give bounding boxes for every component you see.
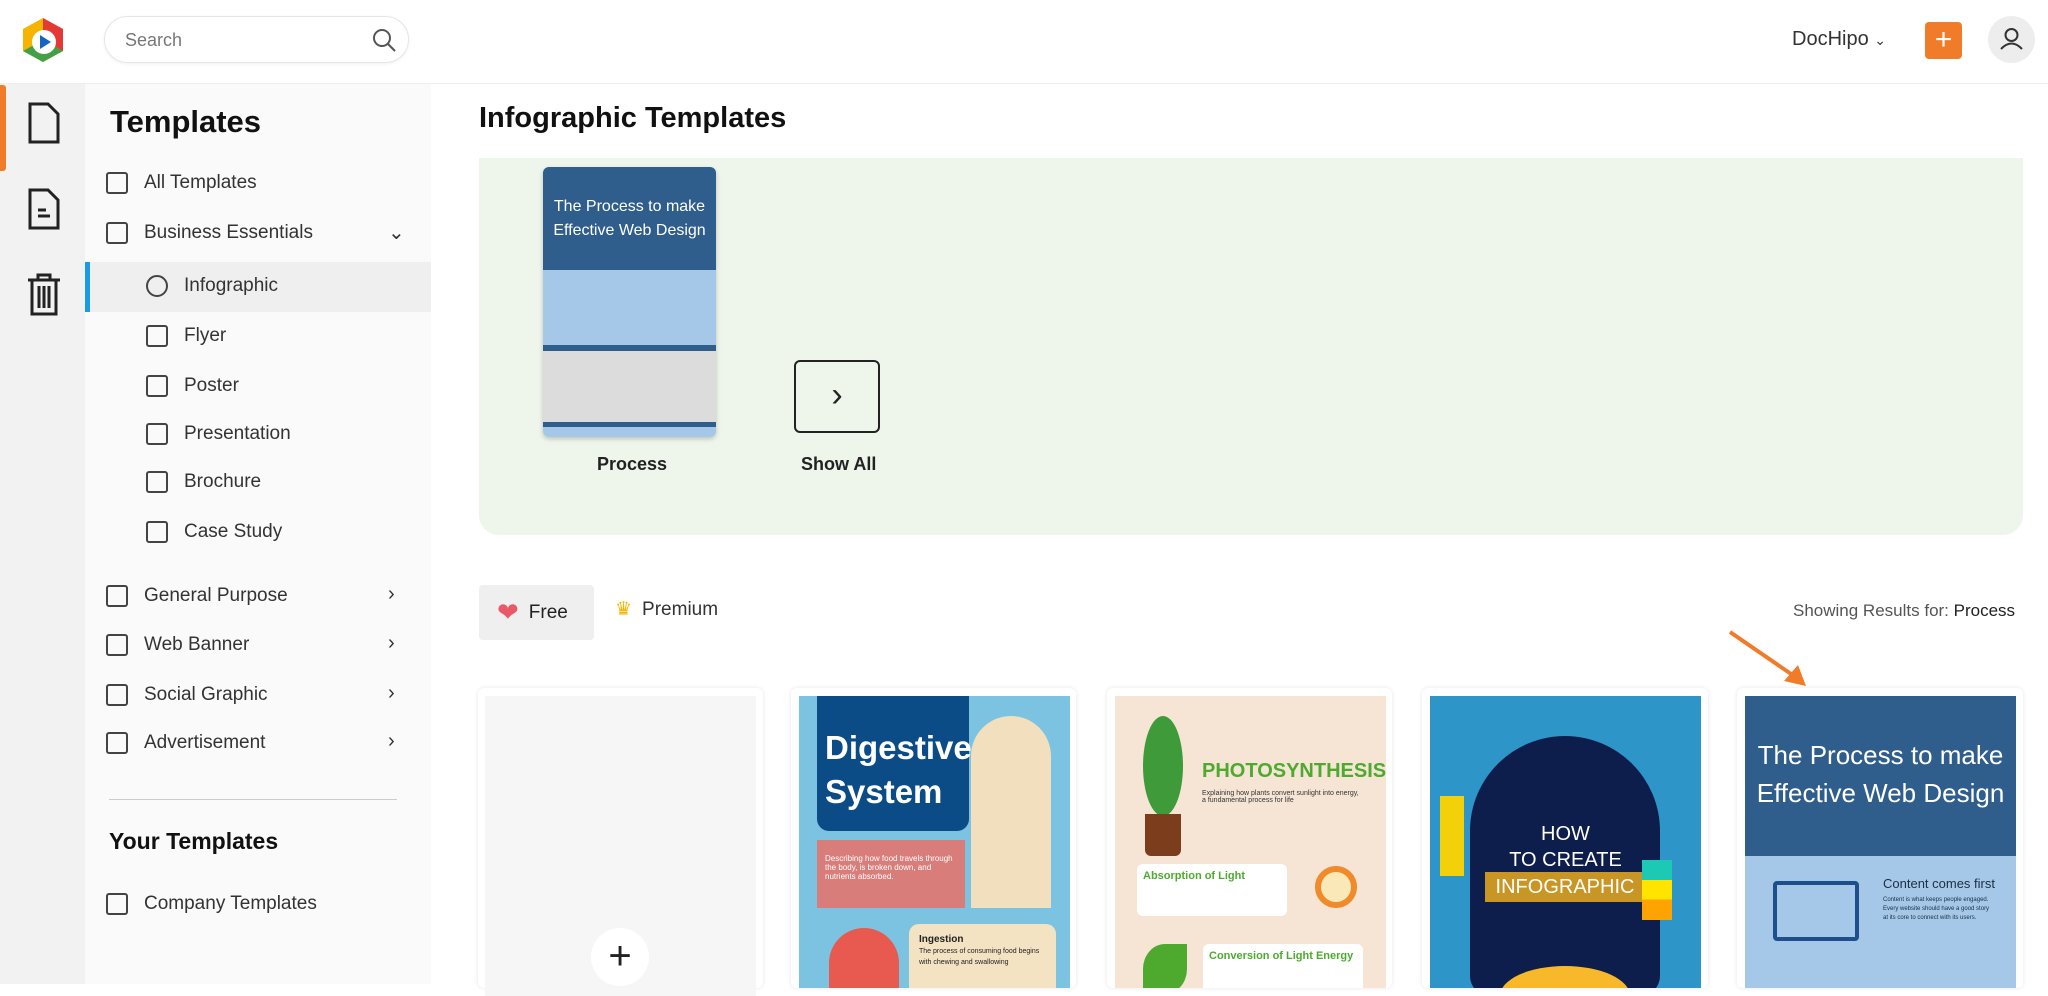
card: process web design (selected): Content is what keeps people engaged. Every website should have a good story at its core to connect with its users. — [1883, 897, 1989, 921]
card: photosynthesis: PHOTOSYNTHESIS — [1202, 760, 1386, 782]
card: blank: + — [608, 934, 632, 978]
sidebar menu: ⌄ — [388, 222, 405, 244]
panel: featured — [479, 158, 2023, 535]
filter: premium: ♛ Premium — [615, 599, 718, 620]
template thumb: process: The Process to make — [554, 198, 705, 215]
sidebar menu: Your Templates — [109, 828, 278, 854]
template thumb: process: Effective Web Design — [553, 222, 706, 239]
show all button — [794, 360, 880, 433]
sidebar menu: Flyer — [184, 325, 226, 346]
show all button: › — [831, 376, 843, 414]
card: digestive system — [791, 688, 1076, 988]
card: digestive system: Describing how food travels through the body, is broken down, and nutrients absorbed. — [825, 854, 953, 881]
sidebar menu: Company Templates — [144, 893, 317, 914]
sidebar menu: › — [388, 682, 395, 704]
card: process web design (selected): The Process to make — [1758, 740, 2003, 770]
icon: trash — [28, 274, 60, 316]
panel: featured: Process — [597, 454, 667, 474]
card: how to create infographic — [1422, 688, 1708, 988]
icon rail — [0, 84, 85, 984]
icon: avatar — [1988, 16, 2035, 63]
icon: plus button: + — [1935, 23, 1952, 56]
sidebar menu: General Purpose — [144, 585, 288, 606]
card: photosynthesis: Absorption of Light — [1143, 870, 1245, 882]
sidebar menu: › — [388, 583, 395, 605]
search box — [104, 16, 409, 63]
panel: featured: Show All — [801, 454, 876, 474]
card: process web design (selected): Content comes first — [1883, 876, 1995, 891]
arrow — [1728, 630, 1806, 686]
sidebar menu — [85, 172, 431, 915]
filter: free: Free — [529, 602, 568, 622]
sidebar menu: Presentation — [184, 423, 291, 444]
sidebar menu: All Templates — [144, 172, 257, 193]
icon: logo — [23, 18, 63, 62]
sidebar menu: Poster — [184, 375, 239, 396]
card: how to create infographic: HOW — [1541, 823, 1590, 845]
sidebar menu: Infographic — [184, 275, 278, 296]
account menu: DocHipo ⌄ — [1792, 28, 1886, 50]
sidebar menu: Social Graphic — [144, 684, 268, 705]
icon: document — [28, 102, 60, 144]
sidebar menu: Business Essentials — [144, 222, 313, 243]
card: process web design (selected) — [1737, 688, 2023, 988]
search box: Search — [125, 30, 182, 50]
card: photosynthesis: Conversion of Light Energy — [1209, 950, 1353, 962]
sidebar menu: Web Banner — [144, 634, 249, 655]
header — [0, 0, 2048, 84]
template thumb: process — [543, 167, 716, 437]
card: digestive system: Digestive — [825, 729, 972, 766]
card: process web design (selected): Effective Web Design — [1757, 778, 2004, 808]
main heading: Infographic Templates — [479, 102, 786, 134]
card: photosynthesis — [1107, 688, 1392, 988]
card: how to create infographic: INFOGRAPHIC — [1496, 876, 1634, 898]
filter: free: ❤ — [497, 597, 519, 627]
results label: Showing Results for: Process — [1793, 601, 2015, 620]
sidebar menu: Advertisement — [144, 732, 265, 753]
card: digestive system: Ingestion — [919, 934, 963, 945]
sidebar menu: Case Study — [184, 521, 282, 542]
card: blank — [478, 688, 763, 988]
sidebar: Templates — [110, 104, 261, 139]
card: photosynthesis: Explaining how plants convert sunlight into energy, a fundamental process for life — [1202, 790, 1359, 804]
icon: plus button — [1925, 22, 1962, 59]
sidebar menu: › — [388, 730, 395, 752]
card: digestive system: The process of consuming food begins with chewing and swallowing — [919, 948, 1039, 966]
sidebar menu: › — [388, 632, 395, 654]
sidebar — [85, 84, 431, 984]
card: digestive system: System — [825, 773, 942, 810]
sidebar menu: Brochure — [184, 471, 261, 492]
card: how to create infographic: TO CREATE — [1509, 849, 1622, 871]
icon: file — [28, 188, 60, 230]
filter: free — [479, 585, 594, 640]
